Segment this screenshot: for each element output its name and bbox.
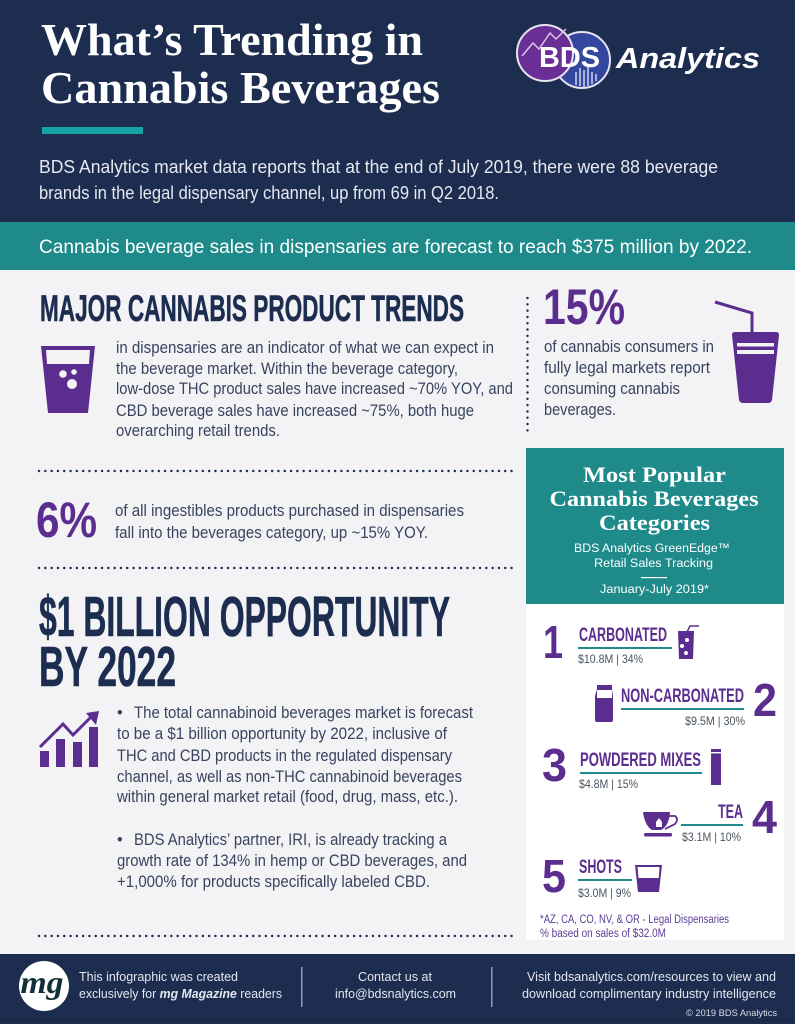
logo: BDS Analytics: Analytics	[615, 43, 760, 75]
copyright: © 2019 BDS Analytics	[686, 1008, 777, 1019]
credit text: This infographic was created	[79, 970, 238, 984]
category 3: powdered mixes: 3	[542, 739, 567, 791]
category 4: tea	[643, 791, 777, 844]
website text: Visit bdsanalytics.com/resources to view and	[527, 970, 776, 984]
website text: download complimentary industry intelligence	[522, 987, 776, 1001]
stat: 6 percent: of all ingestibles products purchased in dispensaries	[115, 502, 464, 520]
title	[41, 14, 440, 113]
icon: fizzy drink glass	[41, 346, 95, 413]
footnote	[540, 914, 729, 940]
icon: tea cup	[643, 812, 677, 836]
category 3: powdered mixes	[542, 739, 721, 791]
intro text	[39, 157, 718, 203]
paragraph: in dispensaries are an indicator of what we can expect in	[116, 339, 494, 357]
bullet text: The total cannabinoid beverages market is forecast	[134, 704, 473, 722]
category 3: powdered mixes: POWDERED MIXES	[580, 749, 701, 771]
stat: 15 percent: of cannabis consumers in	[544, 338, 714, 356]
footnote: *AZ, CA, CO, NV, & OR - Legal Dispensaries	[540, 914, 729, 926]
category 3: powdered mixes: $4.8M | 15%	[579, 777, 638, 791]
bullet text: within general market retail (food, drug, mass, etc.).	[116, 788, 458, 806]
logo: mg magazine	[19, 961, 69, 1011]
footnote: % based on sales of $32.0M	[540, 928, 666, 940]
panel: most popular categories header	[526, 448, 784, 604]
bullet text: BDS Analytics’ partner, IRI, is already tracking a	[134, 831, 448, 849]
category 4: tea: $3.1M | 10%	[682, 830, 741, 844]
bullet text: +1,000% for products specifically labeled CBD.	[117, 873, 430, 891]
footer	[0, 954, 795, 1024]
category 5: shots: 5	[542, 850, 566, 902]
icon: bottle	[595, 685, 613, 722]
title: Cannabis Beverages	[41, 62, 440, 113]
category 1: carbonated: CARBONATED	[579, 624, 667, 646]
icon: growth chart	[40, 711, 99, 767]
title accent bar	[42, 127, 143, 134]
stat: 15 percent: consuming cannabis	[544, 380, 680, 398]
stat: 6 percent	[36, 492, 464, 548]
paragraph: the beverage market. Within the beverage category,	[116, 360, 458, 378]
paragraph: CBD beverage sales have increased ~75%, both huge	[116, 402, 474, 420]
credit text: exclusively for mg Magazine readers	[79, 987, 282, 1001]
category 2: non-carbonated: 2	[753, 674, 777, 726]
credit text	[79, 970, 282, 1001]
category 4: tea: TEA	[718, 801, 743, 823]
icon: soda cup	[678, 626, 699, 659]
panel title: Most Popular	[583, 462, 726, 487]
stat: 15 percent: beverages.	[544, 401, 616, 419]
forecast banner: Cannabis beverage sales in dispensaries are forecast to reach $375 million by 2022.	[39, 237, 752, 258]
contact text: Contact us at	[358, 970, 433, 984]
category 1: carbonated	[543, 616, 699, 668]
title: What’s Trending in	[41, 14, 423, 65]
stat: 15 percent	[543, 279, 779, 419]
heading	[39, 585, 450, 699]
category 1: carbonated: 1	[543, 616, 563, 668]
panel subtitle: January-July 2019*	[600, 582, 709, 596]
panel title: Cannabis Beverages	[550, 486, 759, 511]
intro text: brands in the legal dispensary channel, up from 69 in Q2 2018.	[39, 183, 499, 203]
icon: drink with straw	[715, 302, 779, 403]
forecast banner	[0, 222, 795, 270]
panel subtitle: BDS Analytics GreenEdge™	[574, 541, 730, 555]
stat: 15 percent: fully legal markets report	[544, 359, 710, 377]
panel title	[550, 462, 759, 535]
paragraph: overarching retail trends.	[116, 422, 280, 440]
heading: BY 2022	[39, 635, 176, 699]
bullet text: •	[117, 831, 123, 849]
website text	[522, 970, 776, 1001]
stat: 15 percent: 15%	[543, 279, 625, 335]
paragraph: low-dose THC product sales have increased ~70% YOY, and	[116, 380, 513, 398]
icon: shot glass	[635, 865, 662, 892]
panel subtitle	[574, 541, 730, 596]
category 2: non-carbonated	[595, 674, 777, 728]
intro text: BDS Analytics market data reports that at the end of July 2019, there were 88 beverage	[39, 157, 718, 177]
category 2: non-carbonated: $9.5M | 30%	[685, 714, 745, 728]
stat: 6 percent: fall into the beverages category, up ~15% YOY.	[115, 524, 428, 542]
bullet text: to be a $1 billion opportunity by 2022, inclusive of	[117, 725, 447, 743]
category 5: shots: $3.0M | 9%	[578, 886, 631, 900]
bullet text: THC and CBD products in the regulated dispensary	[117, 747, 453, 765]
bullet text	[116, 704, 473, 891]
contact text: info@bdsnalytics.com	[335, 987, 456, 1001]
panel title: Categories	[599, 510, 710, 535]
contact text	[335, 970, 456, 1001]
logo: BDS Analytics: BDS	[539, 42, 600, 74]
bullet text: •	[117, 704, 123, 722]
category 4: tea: 4	[752, 791, 777, 843]
category 1: carbonated: $10.8M | 34%	[578, 652, 643, 666]
panel: major cannabis product trends	[40, 287, 513, 440]
panel: category ranking	[526, 604, 784, 940]
category 5: shots: SHOTS	[579, 856, 622, 878]
logo: BDS Analytics	[517, 25, 760, 88]
logo: mg magazine: mg	[20, 964, 64, 1000]
heading: MAJOR CANNABIS PRODUCT TRENDS	[40, 287, 464, 329]
heading: $1 BILLION OPPORTUNITY	[39, 585, 450, 649]
bullet text: channel, as well as non-THC cannabinoid beverages	[117, 768, 462, 786]
header panel	[0, 0, 795, 222]
panel subtitle: Retail Sales Tracking	[594, 556, 713, 570]
panel: 1 billion opportunity	[39, 585, 473, 891]
icon: drink mix stick	[711, 749, 721, 785]
paragraph	[116, 339, 513, 440]
bullet text: growth rate of 134% in hemp or CBD beverages, and	[117, 852, 467, 870]
category 5: shots	[542, 850, 662, 902]
stat: 6 percent: 6%	[36, 492, 97, 548]
